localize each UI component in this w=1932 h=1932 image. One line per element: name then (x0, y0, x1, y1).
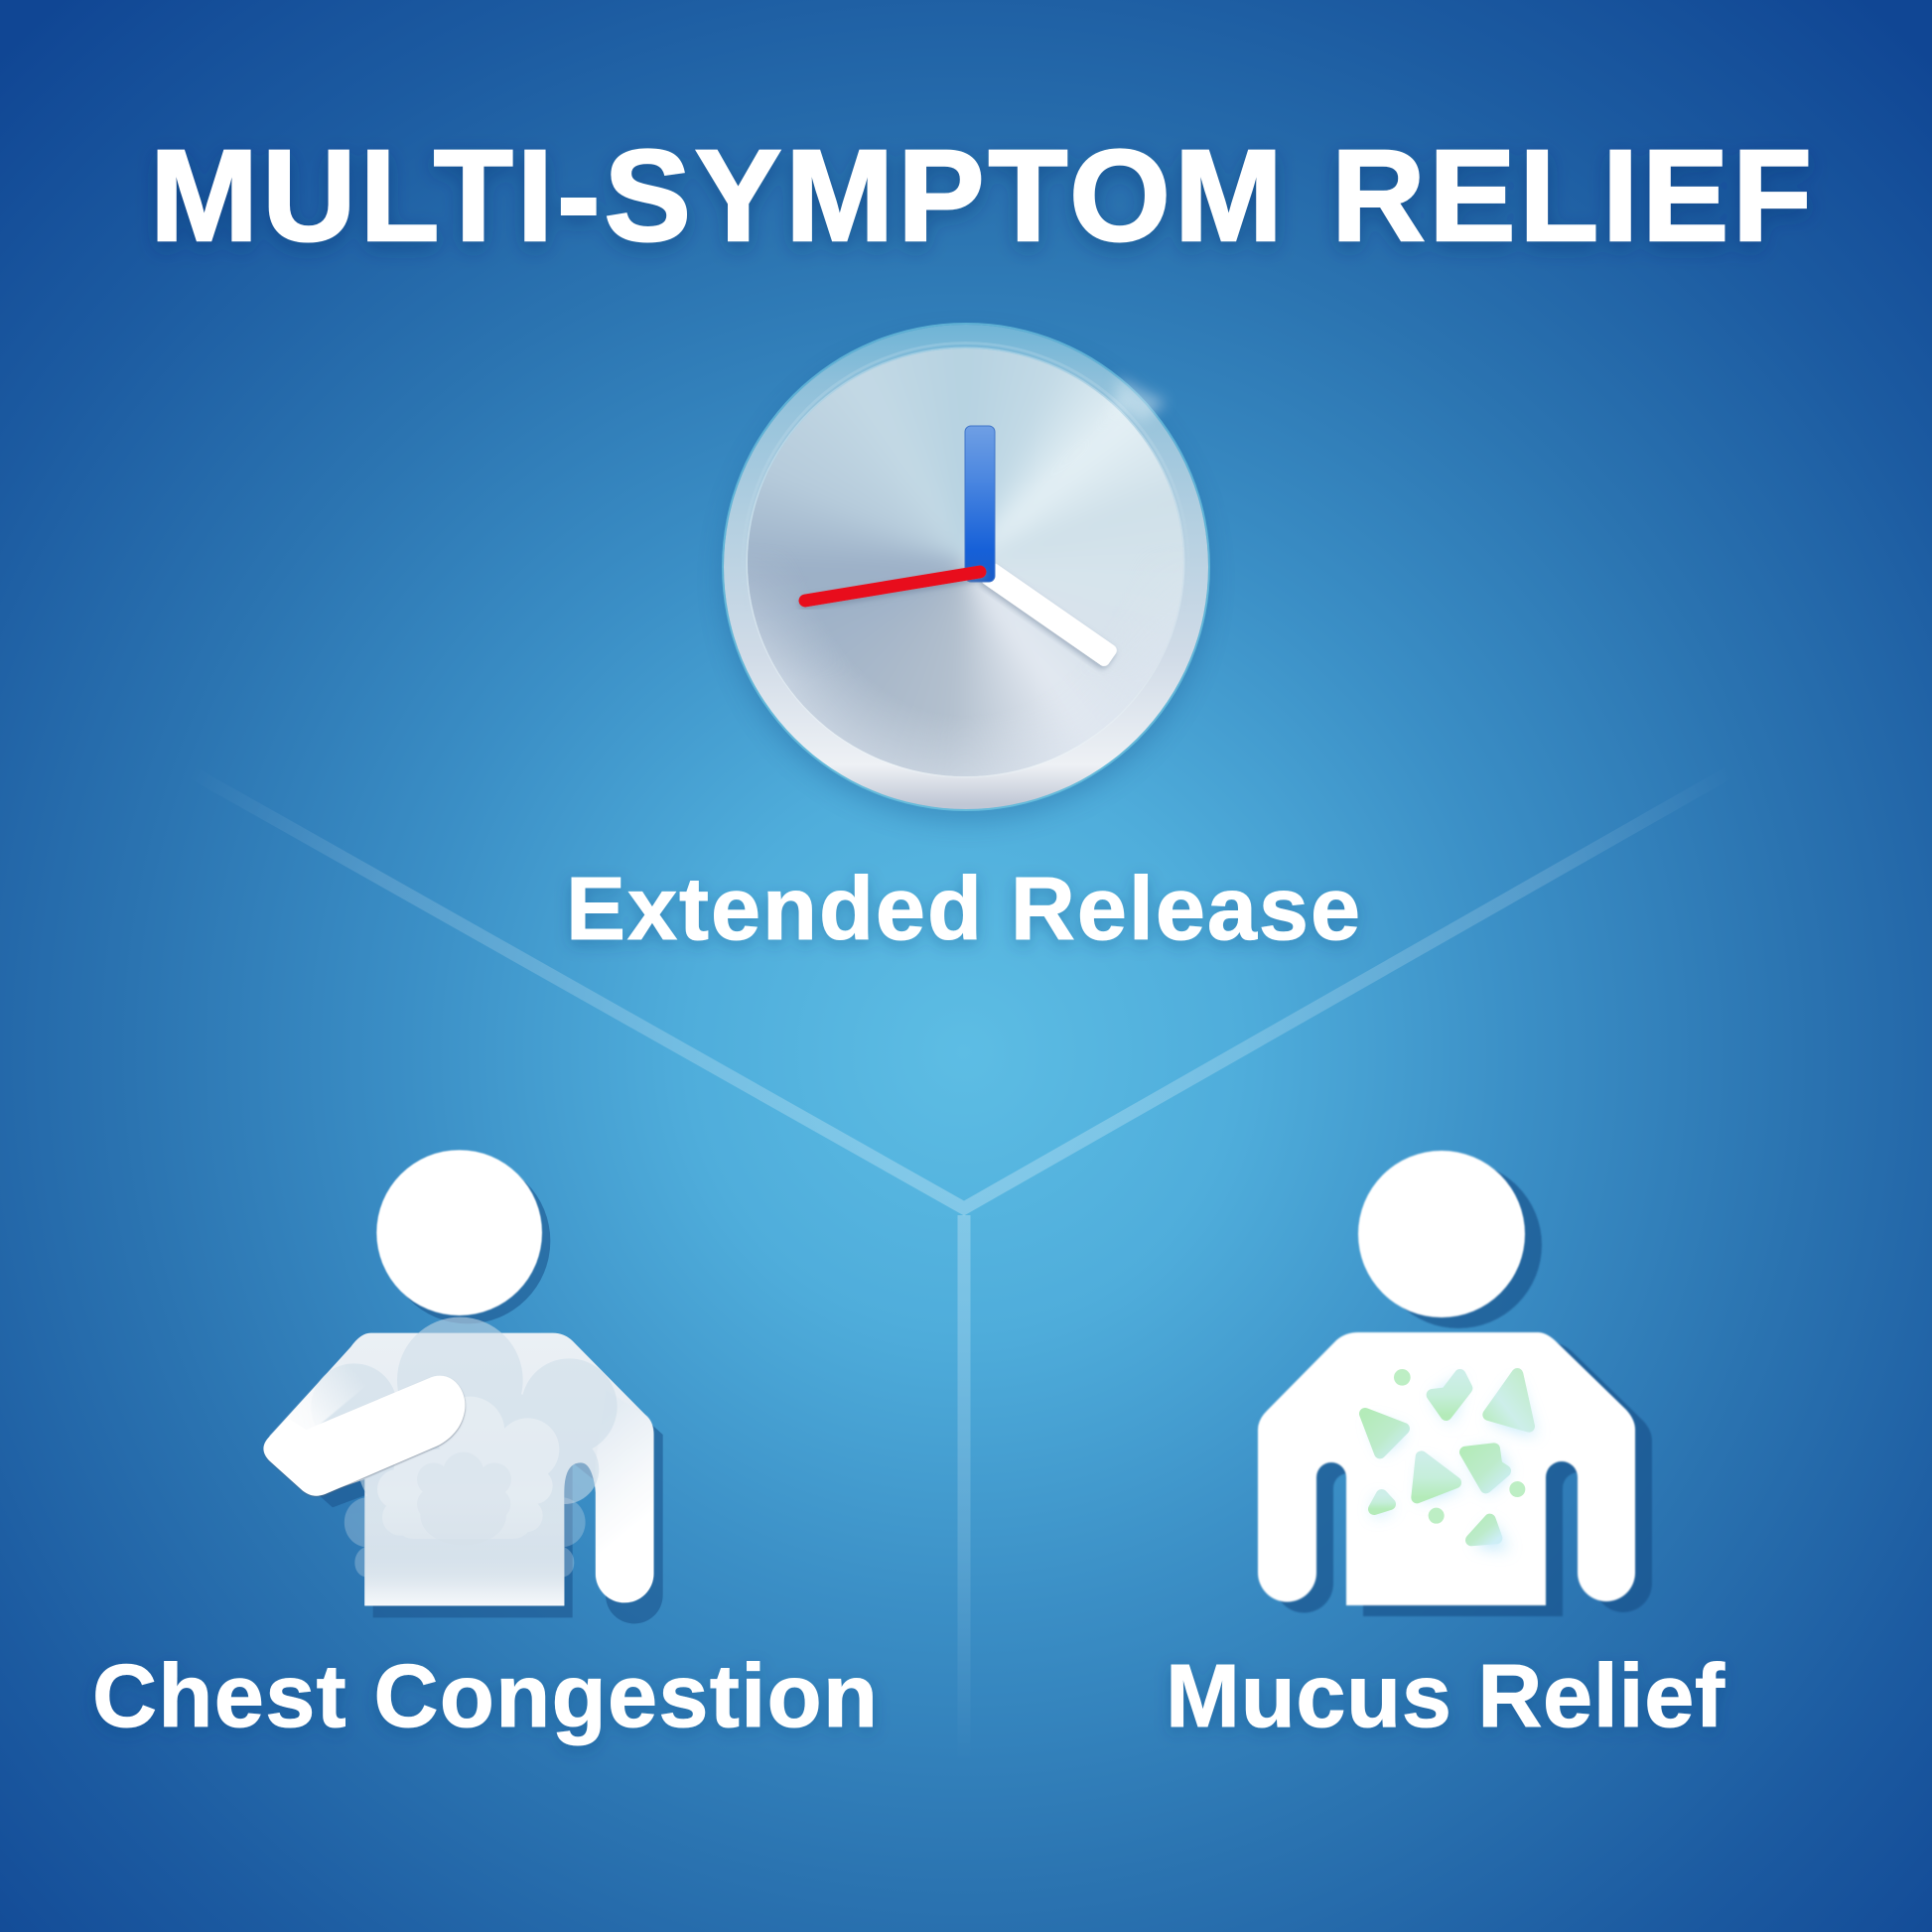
figure shadow (275, 1159, 663, 1623)
blue hand (965, 426, 995, 582)
chest cloud: outer (311, 1317, 618, 1605)
label: Mucus Relief: Mucus Relief (1166, 1647, 1725, 1746)
right arm highlight (596, 1390, 653, 1602)
torso and arm (270, 1333, 653, 1605)
chest cloud: inner (417, 1452, 511, 1546)
forearm across chest (263, 1376, 465, 1496)
mint shards (1365, 1374, 1529, 1540)
head (376, 1150, 542, 1315)
divider lines: Y shape (186, 764, 1735, 1762)
title (150, 122, 1812, 268)
figure: chest congestion person (263, 1150, 663, 1623)
body (1258, 1332, 1635, 1605)
elbow blend into shoulder (270, 1347, 369, 1449)
label: Extended Release: Extended Release (566, 860, 1360, 959)
mucus particles (1365, 1369, 1536, 1551)
clock outer bezel (724, 325, 1208, 809)
torso lower fade (364, 1496, 564, 1605)
figure shadow (1275, 1162, 1652, 1616)
head (1358, 1151, 1525, 1317)
chest cloud: middle (377, 1397, 559, 1539)
icon: clock (719, 323, 1212, 830)
label: Chest Congestion: Chest Congestion (92, 1647, 878, 1746)
figure: mucus relief person (1258, 1151, 1652, 1616)
title word two: RELIEF (1331, 122, 1812, 268)
chest cloud: side lobes (345, 1497, 586, 1577)
clock hands and glint (798, 373, 1170, 671)
clock inner ring (762, 342, 1169, 471)
clock face brushed metal (748, 348, 1183, 776)
red hand (805, 572, 980, 601)
white hand (979, 561, 1119, 668)
soft blue glow (1370, 1377, 1536, 1551)
title word one: MULTI-SYMPTOM (150, 122, 1283, 268)
glint (1023, 377, 1167, 501)
mint dots (1394, 1369, 1525, 1524)
